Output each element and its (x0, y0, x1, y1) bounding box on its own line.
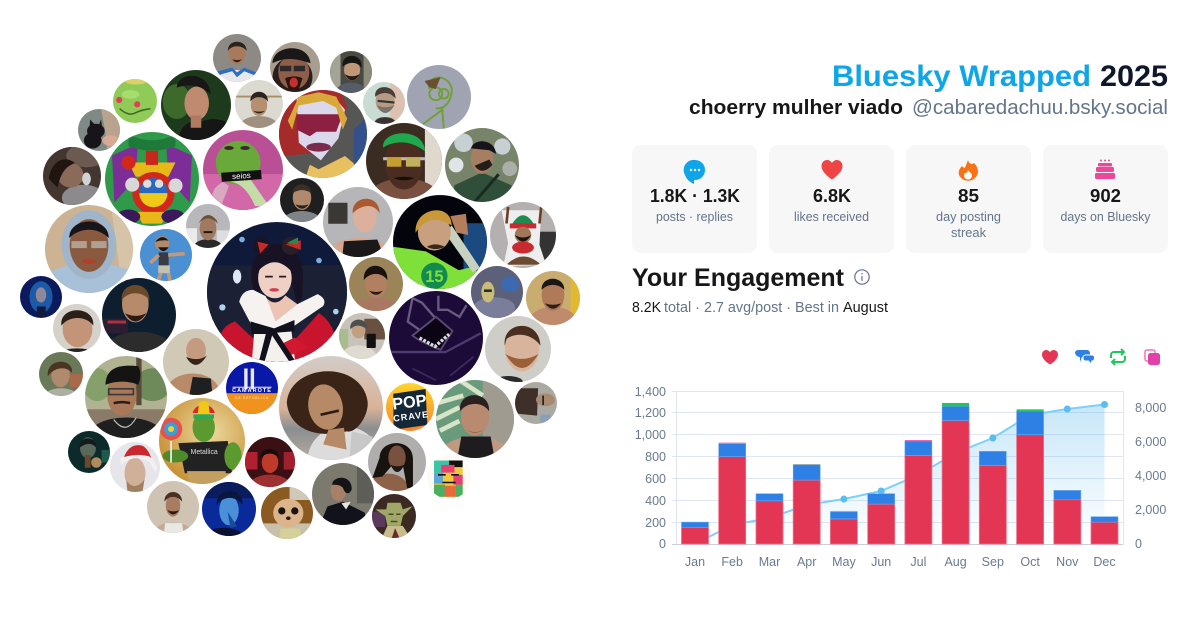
icon: flame (959, 160, 978, 181)
avatar: man with moustache at night (102, 278, 176, 352)
chart: monthly engagement stacked bars with cumulative line (635, 385, 1166, 569)
month labels: Apr (797, 555, 816, 569)
avatar: Pop Crave logo (386, 383, 434, 431)
month labels (685, 555, 1116, 569)
avatar: man with afro, sunset sea (279, 356, 383, 460)
right axis labels: 0 (1135, 537, 1142, 551)
avatar: man with glasses and grey beard (363, 82, 405, 124)
avatar: man lying on pillow (43, 147, 101, 205)
stat card: days on Bluesky: days on Bluesky (1060, 210, 1151, 224)
avatar: winking man in Santa hat (110, 442, 160, 492)
avatar: dark selfie with cup (68, 431, 110, 473)
title: 2025 (1100, 60, 1168, 93)
left axis labels: 1,200 (635, 406, 666, 420)
avatar: colourful cartoon clown bird (105, 132, 199, 226)
user name and handle: choerry mulher viado (689, 97, 903, 119)
stat card: posts and replies: 1.8K · 1.3K (650, 185, 741, 206)
stat card: days on Bluesky (1043, 145, 1168, 253)
month labels: May (832, 555, 856, 569)
left axis labels: 200 (645, 516, 666, 530)
icon: repost legend (1111, 349, 1125, 365)
engagement summary: total · 2.7 avg/post · Best in (664, 300, 839, 316)
avatar: colourful abstract face illustration (427, 455, 471, 499)
avatar: black cat (78, 109, 120, 151)
avatar: man with beard, dark background (330, 51, 372, 93)
avatar: meerkat plush toy (261, 487, 313, 539)
avatar: person in light blue hoodie (45, 205, 133, 293)
avatar: man in white and blue jersey (213, 34, 261, 82)
month labels: Nov (1056, 555, 1079, 569)
avatar: man taking mirror selfie (339, 313, 385, 359)
avatar: man in black tank, leaf wallpaper (436, 380, 514, 458)
month labels: Aug (944, 555, 967, 569)
month labels: Sep (982, 555, 1004, 569)
avatar: man with cap and moustache (186, 204, 230, 248)
stat card: day posting streak (906, 145, 1031, 253)
month labels: Dec (1093, 555, 1116, 569)
avatar: masked cartoon villain (279, 90, 367, 178)
avatar: man in profile, trees behind (445, 128, 519, 202)
left axis labels: 800 (645, 450, 666, 464)
avatar: green Haro character (113, 76, 157, 123)
avatar: green orc with lollipop (159, 398, 245, 484)
month labels: Feb (721, 555, 743, 569)
left axis labels: 0 (659, 537, 666, 551)
left axis labels: 1,400 (635, 385, 666, 399)
left axis labels: 1,000 (635, 428, 666, 442)
avatar: green stick figure drawing (407, 65, 471, 129)
avatar: woman in blue neon light (20, 276, 62, 318)
avatar cluster (20, 34, 580, 544)
stat card: likes received: likes received (794, 210, 869, 224)
chart legend icons (1042, 349, 1160, 365)
avatar: man with black cap and glasses (270, 42, 320, 97)
avatar: man with green bandana and shiny glasses (366, 123, 442, 199)
avatar: man in profile in alley (312, 463, 374, 525)
right axis labels: 2,000 (1135, 503, 1166, 517)
stat card: likes received: 6.8K (813, 185, 852, 206)
month labels: Jun (871, 555, 891, 569)
stat card: likes received (769, 145, 894, 253)
icon: birthday cake (1095, 160, 1115, 179)
replies bars (682, 406, 1118, 528)
left axis labels (635, 385, 666, 551)
avatar: shirtless man, tan background (349, 257, 403, 311)
avatar: man in neon green suit with headset (393, 195, 487, 289)
avatar: man with cap, grey background (280, 178, 324, 222)
left axis labels: 600 (645, 472, 666, 486)
engagement summary: August (843, 300, 888, 316)
avatar: man with black cap, foliage (161, 70, 231, 140)
icon: speech bubble (684, 160, 705, 184)
heading: Your Engagement: Your Engagement (632, 264, 845, 292)
user name and handle (689, 97, 1168, 119)
avatar: bearded man, ginger hair (485, 316, 551, 388)
avatar: sideways man (515, 382, 557, 424)
avatar: plush toy on grey cloth (471, 266, 523, 318)
avatar: cartoon bearded man on blue (140, 229, 192, 281)
avatar: man in red light (245, 437, 295, 500)
engagement summary (632, 300, 888, 316)
avatar: shirtless man on beach (526, 271, 580, 325)
avatar: Camarote da República logo (226, 362, 278, 414)
avatar: man with long dreadlocks (368, 433, 426, 506)
avatar: man in deep blue light (202, 482, 256, 544)
left axis labels: 400 (645, 494, 666, 508)
avatar: woman in red Santa dress, largest circle (207, 222, 347, 362)
stat card: day posting streak: 85 (958, 185, 979, 206)
engagement summary: 8.2K (632, 300, 661, 316)
avatar: man with cap and glasses in park (85, 356, 167, 438)
right axis labels: 4,000 (1135, 469, 1166, 483)
right axis labels: 8,000 (1135, 401, 1166, 415)
right axis labels: 6,000 (1135, 435, 1166, 449)
avatar: man with moustache in white tank (147, 481, 199, 543)
user name and handle: @cabaredachuu.bsky.social (912, 97, 1168, 119)
icon: like legend (1042, 350, 1058, 364)
avatar: man with glasses in bright kitchen (235, 80, 283, 128)
stat card: posts and replies: posts · replies (656, 210, 733, 224)
avatar: bearded man sticker with reindeer hat (490, 202, 556, 268)
stat card: day posting streak: streak (951, 226, 987, 240)
avatar: ginger man in black tank top (323, 187, 393, 257)
avatar: Yoda (372, 494, 416, 538)
icon: info (855, 270, 869, 284)
icon: quote legend (1145, 350, 1160, 365)
avatar: dark purple geometric mask (389, 291, 483, 385)
stat card: days on Bluesky: 902 (1090, 185, 1121, 206)
month labels: Jan (685, 555, 705, 569)
avatar: young man, forest behind (39, 352, 83, 396)
month labels: Mar (759, 555, 780, 569)
right axis labels (1135, 401, 1166, 551)
avatar: young man, curly hair, pale background (53, 304, 101, 356)
likes bars (682, 420, 1118, 544)
stat card: posts and replies (632, 145, 757, 253)
avatar: bald bearded man in tank top (163, 329, 229, 395)
icon: reply legend (1075, 350, 1094, 364)
repost and quote bar segments (719, 403, 1044, 512)
cumulative area and line (695, 401, 1108, 544)
gridlines and axis (672, 391, 1124, 544)
avatar: green mascot with seios label (203, 130, 283, 210)
title: Bluesky Wrapped (832, 60, 1091, 93)
icon: heart (822, 160, 842, 180)
month labels: Jul (910, 555, 926, 569)
stat card: day posting streak: day posting (936, 210, 1001, 224)
month labels: Oct (1020, 555, 1040, 569)
